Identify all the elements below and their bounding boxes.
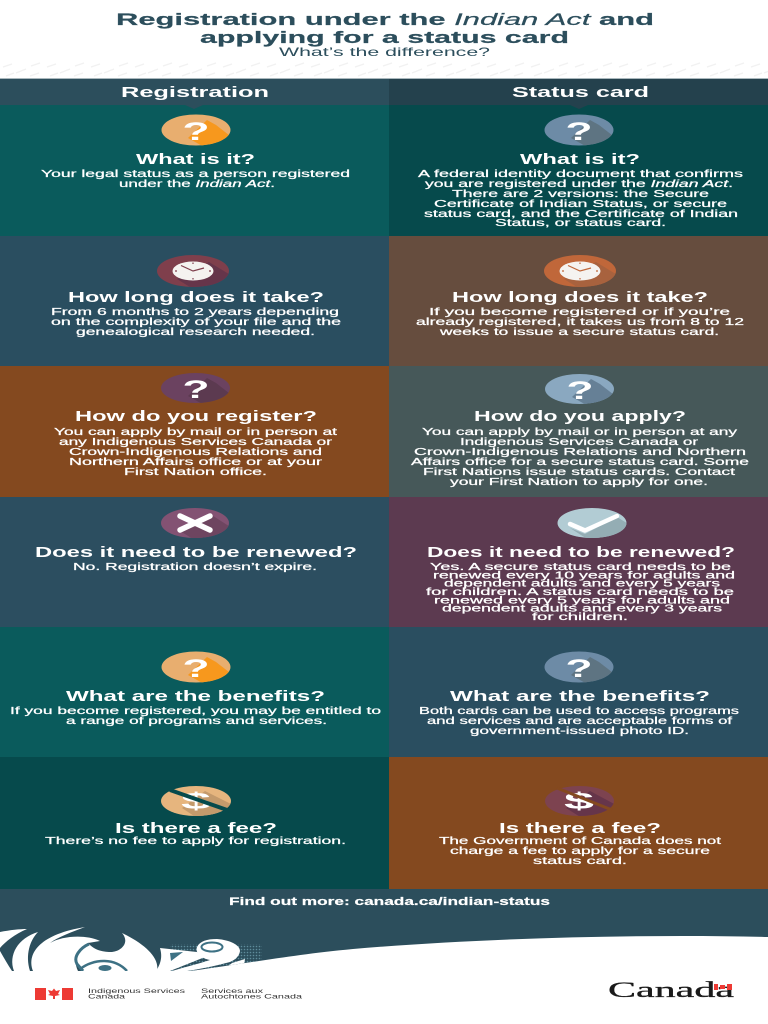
heading: Is there a fee? [115, 821, 277, 837]
text block: government-issued photo ID. [470, 726, 689, 737]
icon: check mark [558, 508, 626, 538]
panel: status card, renewal [389, 497, 768, 627]
heading: How long does it take? [68, 290, 324, 306]
department name, English: Canada [88, 994, 126, 1000]
text block: If you become registered or if you’re [429, 307, 731, 318]
heading: Does it need to be renewed? [427, 545, 735, 561]
panel: registration, how do you register [0, 366, 389, 497]
text block: charge a fee to apply for a secure [450, 846, 711, 857]
heading: What are the benefits? [66, 689, 325, 705]
bird artwork [0, 927, 262, 971]
panel: registration, benefits [0, 627, 389, 757]
panel: registration, renewal [0, 497, 389, 627]
subtitle: What’s the difference? [279, 45, 491, 59]
title [116, 10, 654, 47]
column header: Status card [389, 79, 768, 105]
text block: already registered, it takes us from 8 to 12 [416, 317, 745, 328]
icon: question mark [162, 114, 230, 146]
text block: Affairs office for a secure status card. Some [411, 457, 750, 468]
heading: What is it? [520, 152, 640, 168]
title: applying for a status card [200, 28, 569, 47]
icon: cross [161, 508, 229, 538]
text block: Yes. A secure status card needs to be [430, 562, 732, 573]
panel: registration, fee [0, 757, 389, 889]
department name, French [201, 988, 303, 1000]
heading: What is it? [136, 152, 255, 168]
text block [419, 706, 739, 737]
text block [411, 427, 750, 488]
text block: under the Indian Act . [119, 179, 275, 190]
text block: renewed every 5 years for adults and [434, 596, 730, 606]
text block: There’s no fee to apply for registration. [45, 836, 346, 847]
icon: clock [157, 255, 229, 287]
text block: Your legal status as a person registered [41, 169, 350, 180]
logo: Canada wordmark: Canada [608, 977, 734, 1002]
icon: crossed-out dollar sign: $ [564, 788, 594, 814]
text block: The Government of Canada does not [439, 836, 721, 847]
text block: on the complexity of your file and the [51, 317, 342, 328]
text block [51, 307, 342, 338]
text block [10, 706, 382, 727]
panel: status card, how long [389, 236, 768, 366]
icon: clock [544, 255, 616, 287]
text block: No. Registration doesn’t expire. [73, 562, 317, 573]
text block: You can apply by mail or in person at [54, 427, 337, 438]
text block: First Nation office. [124, 467, 267, 478]
text block: From 6 months to 2 years depending [51, 307, 339, 318]
footer band [0, 889, 768, 971]
text block: Certificate of Indian Status, or secure [434, 199, 728, 210]
icon: Canadian flag [35, 988, 73, 1000]
panel: status card, what is it [389, 105, 768, 236]
text block: There are 2 versions: the Secure [452, 189, 710, 200]
heading: How long does it take? [452, 290, 708, 306]
icon: question mark [161, 373, 230, 403]
text block: If you become registered, you may be entitled to [10, 706, 382, 717]
text block: you are registered under the Indian Act . [425, 179, 733, 190]
panel: status card, fee [389, 757, 768, 889]
icon: small flag [714, 984, 732, 990]
heading: How do you register? [75, 409, 317, 425]
icon: question mark: ? [182, 655, 210, 683]
text block: Status, or status card. [495, 218, 666, 229]
heading: Does it need to be renewed? [35, 545, 357, 561]
column header: Registration: Registration [121, 85, 269, 101]
icon: question mark [162, 652, 230, 682]
icon: question mark: ? [182, 118, 210, 146]
icon: crossed-out dollar sign [161, 786, 231, 816]
text block: your First Nation to apply for one. [450, 477, 708, 488]
department name, English [88, 988, 186, 1000]
text block: First Nations issue status cards. Contact [423, 467, 735, 478]
text block: genealogical research needed. [76, 327, 315, 338]
text block: weeks to issue a secure status card. [438, 327, 719, 338]
icon: question mark: ? [566, 655, 592, 683]
icon: crossed-out dollar sign: $ [181, 788, 211, 814]
text block: status card. [533, 856, 627, 867]
text block [426, 562, 735, 623]
icon: question mark [544, 114, 614, 146]
heading: Is there a fee? [499, 821, 661, 837]
text block [418, 169, 743, 229]
text block: dependent adults and every 5 years [444, 578, 720, 590]
text block: renewed every 10 years for adults and [433, 570, 735, 582]
text block [54, 427, 337, 478]
title: Registration under the Indian Act and [116, 10, 654, 29]
column header: Status card: Status card [512, 85, 649, 101]
link text: Find out more: canada.ca/indian-status [229, 896, 550, 908]
panel: registration, how long [0, 236, 389, 366]
panel: status card, benefits [389, 627, 768, 757]
text block: any Indigenous Services Canada or [59, 437, 333, 448]
panel: registration, what is it [0, 105, 389, 236]
text block: Indigenous Services Canada or [460, 437, 699, 448]
logo: Canada wordmark [608, 977, 734, 1002]
text block: You can apply by mail or in person at any [422, 427, 737, 438]
text block: for children. [532, 612, 628, 623]
text block: Northern Affairs office or at your [69, 457, 323, 468]
department name, English: Indigenous Services [88, 988, 186, 995]
icon: question mark [544, 652, 614, 682]
text block: a range of programs and services. [66, 716, 327, 727]
heading: How do you apply? [474, 409, 686, 425]
icon: question mark: ? [566, 377, 594, 405]
logo: Indigenous Services Canada [35, 988, 303, 1000]
text block: Crown-Indigenous Relations and [69, 447, 322, 458]
text block: dependent adults and every 3 years [442, 604, 722, 614]
text block [41, 169, 350, 190]
icon: question mark: ? [182, 376, 210, 404]
department name, French: Services aux [201, 988, 264, 995]
text block [416, 307, 745, 338]
text block: A federal identity document that confirms [418, 169, 743, 180]
icon: question mark [545, 374, 614, 404]
text block: and services and are acceptable forms of [427, 716, 732, 727]
text block: status card, and the Certificate of Indian [424, 209, 738, 220]
column header: Registration [0, 79, 389, 105]
text block [439, 836, 721, 867]
text block: Crown-Indigenous Relations and Northern [414, 447, 746, 458]
department name, French: Autochtones Canada [201, 994, 303, 1000]
icon: crossed-out dollar sign [545, 786, 614, 816]
text block: Both cards can be used to access programs [419, 706, 739, 717]
heading: What are the benefits? [450, 689, 710, 705]
text block: for children. A status card needs to be [426, 587, 735, 598]
panel: status card, how do you apply [389, 366, 768, 497]
icon: question mark: ? [566, 118, 592, 146]
